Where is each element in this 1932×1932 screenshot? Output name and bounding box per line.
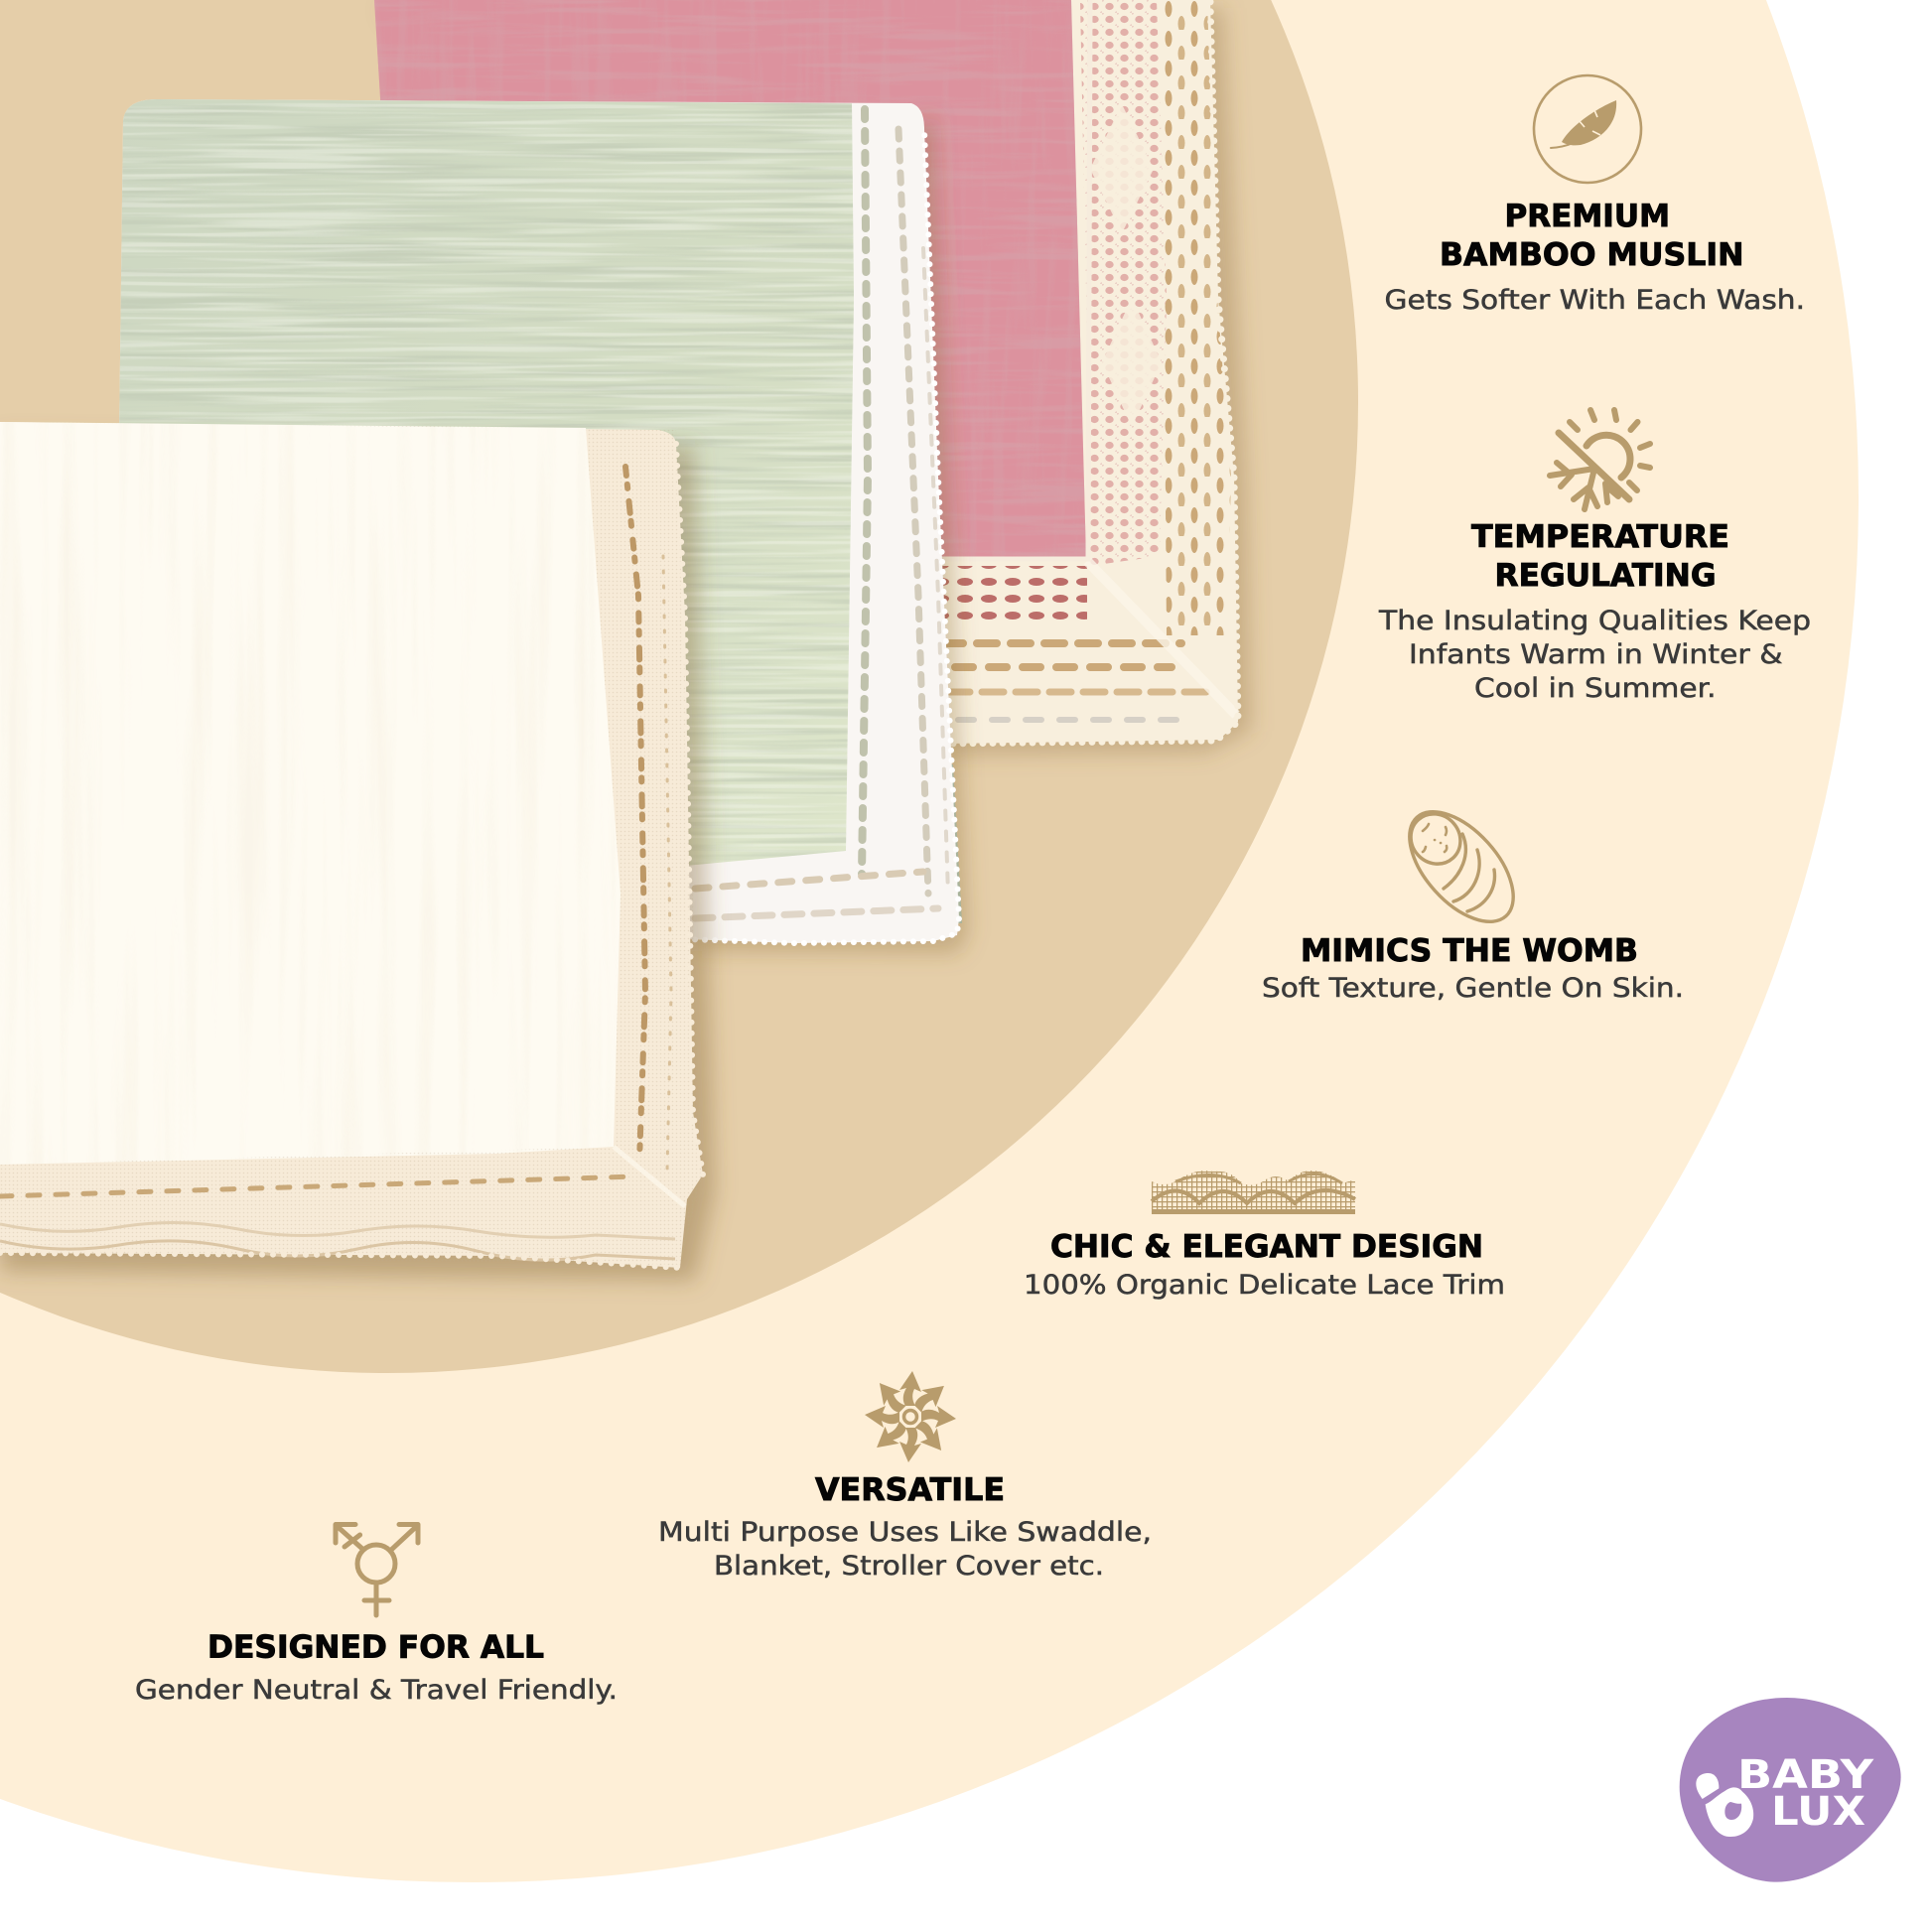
cream white muslin blanket with beige lace bbox=[0, 422, 715, 1281]
heading: versatile: VERSATILE bbox=[815, 1472, 1005, 1508]
logo wordmark: LUX bbox=[1771, 1789, 1865, 1835]
icon: sun and snowflake bbox=[1550, 410, 1650, 509]
text: softer with each wash: Gets Softer With Each Wash. bbox=[1384, 285, 1805, 316]
text: insulating qualities: Cool in Summer. bbox=[1474, 673, 1716, 704]
feature: mimics the womb bbox=[1262, 793, 1684, 1004]
heading: temperature regulating: TEMPERATURE bbox=[1471, 519, 1729, 555]
heading: premium bamboo muslin: PREMIUM bbox=[1505, 199, 1670, 234]
text: insulating qualities: The Insulating Qualities Keep bbox=[1378, 606, 1811, 636]
heading: mimics the womb: MIMICS THE WOMB bbox=[1301, 933, 1638, 969]
logo blob bbox=[1680, 1698, 1901, 1882]
text: insulating qualities: Infants Warm in Winter & bbox=[1409, 639, 1783, 670]
feature: designed for all bbox=[135, 1525, 618, 1706]
feature: versatile bbox=[658, 1371, 1152, 1582]
text: multi purpose uses: Blanket, Stroller Cover etc. bbox=[714, 1551, 1104, 1582]
heading: designed for all: DESIGNED FOR ALL bbox=[207, 1630, 544, 1666]
logo baby mark bbox=[1696, 1773, 1753, 1837]
logo: Baby Lux bbox=[1680, 1698, 1901, 1882]
text: gender neutral: Gender Neutral & Travel Friendly. bbox=[135, 1675, 618, 1706]
feature: temperature regulating bbox=[1378, 410, 1811, 704]
background: inner tan circle bbox=[0, 0, 1358, 1373]
feature: chic and elegant design bbox=[1024, 1171, 1505, 1301]
icon: feather in circle bbox=[1534, 75, 1641, 183]
icon: eight radiating arrows bbox=[865, 1371, 956, 1462]
text: multi purpose uses: Multi Purpose Uses Like Swaddle, bbox=[658, 1517, 1152, 1548]
icon: swaddled baby bbox=[1390, 793, 1533, 940]
sage green muslin blanket with white lace bbox=[119, 99, 968, 953]
icon: gender neutral symbol bbox=[336, 1525, 418, 1615]
heading: chic and elegant design: CHIC & ELEGANT DESIGN bbox=[1050, 1229, 1483, 1265]
icon: lace trim bbox=[1152, 1171, 1355, 1214]
heading: temperature regulating: REGULATING bbox=[1495, 558, 1716, 594]
pink muslin blanket with cream lace bbox=[374, 0, 1251, 755]
heading: premium bamboo muslin: BAMBOO MUSLIN bbox=[1440, 237, 1743, 273]
text: organic lace trim: 100% Organic Delicate Lace Trim bbox=[1024, 1270, 1505, 1301]
logo wordmark: BABY bbox=[1737, 1752, 1874, 1798]
text: soft texture: Soft Texture, Gentle On Skin. bbox=[1262, 973, 1684, 1004]
feature: premium bamboo muslin bbox=[1384, 75, 1805, 316]
